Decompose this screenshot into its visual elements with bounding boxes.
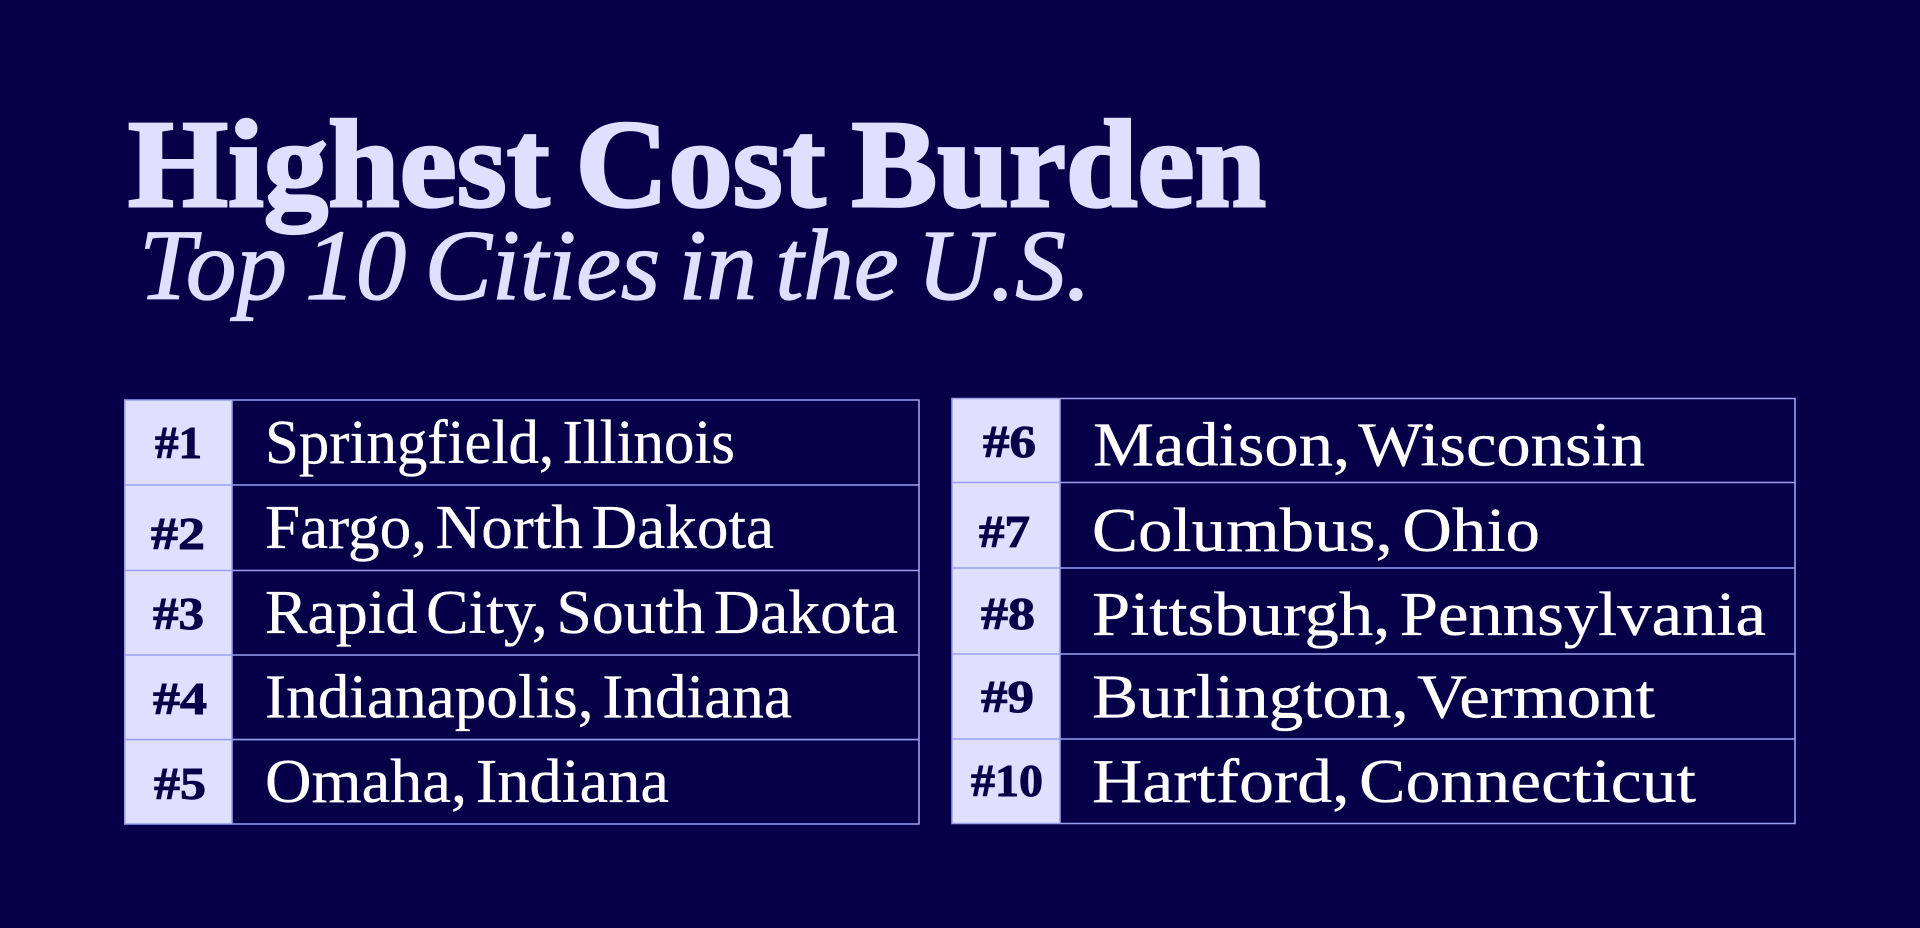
row 7: Columbus, Ohio [1092,497,1540,565]
title: Highest Cost Burden [128,96,1266,234]
row 3: Rapid City, South Dakota [265,579,898,647]
row 10: Hartford, Connecticut [1092,748,1696,816]
row 5: #5 [154,759,206,809]
row 1: Springfield, Illinois [265,409,735,477]
table grid left [125,400,919,824]
row 2: Fargo, North Dakota [265,494,774,562]
table grid right [952,398,1795,824]
row 2: #2 [151,509,205,559]
row 8: Pittsburgh, Pennsylvania [1092,581,1766,649]
row 10: #10 [971,756,1043,806]
row 4: Indianapolis, Indiana [265,664,792,732]
row 4: #4 [153,674,207,724]
row 3: #3 [153,589,204,639]
rank badges right [952,398,1060,824]
panel: ranking table left [125,400,919,824]
row 1: #1 [155,418,202,468]
rank badges left [125,400,232,824]
subtitle: Top 10 Cities in the U.S. [139,209,1091,321]
row 7: #7 [979,507,1030,557]
row 5: Omaha, Indiana [265,748,669,816]
row 9: Burlington, Vermont [1092,664,1655,732]
row 6: Madison, Wisconsin [1093,412,1645,480]
row 9: #9 [981,672,1034,722]
row 6: #6 [983,417,1036,467]
row 8: #8 [981,589,1035,639]
panel: ranking table right [952,398,1795,824]
